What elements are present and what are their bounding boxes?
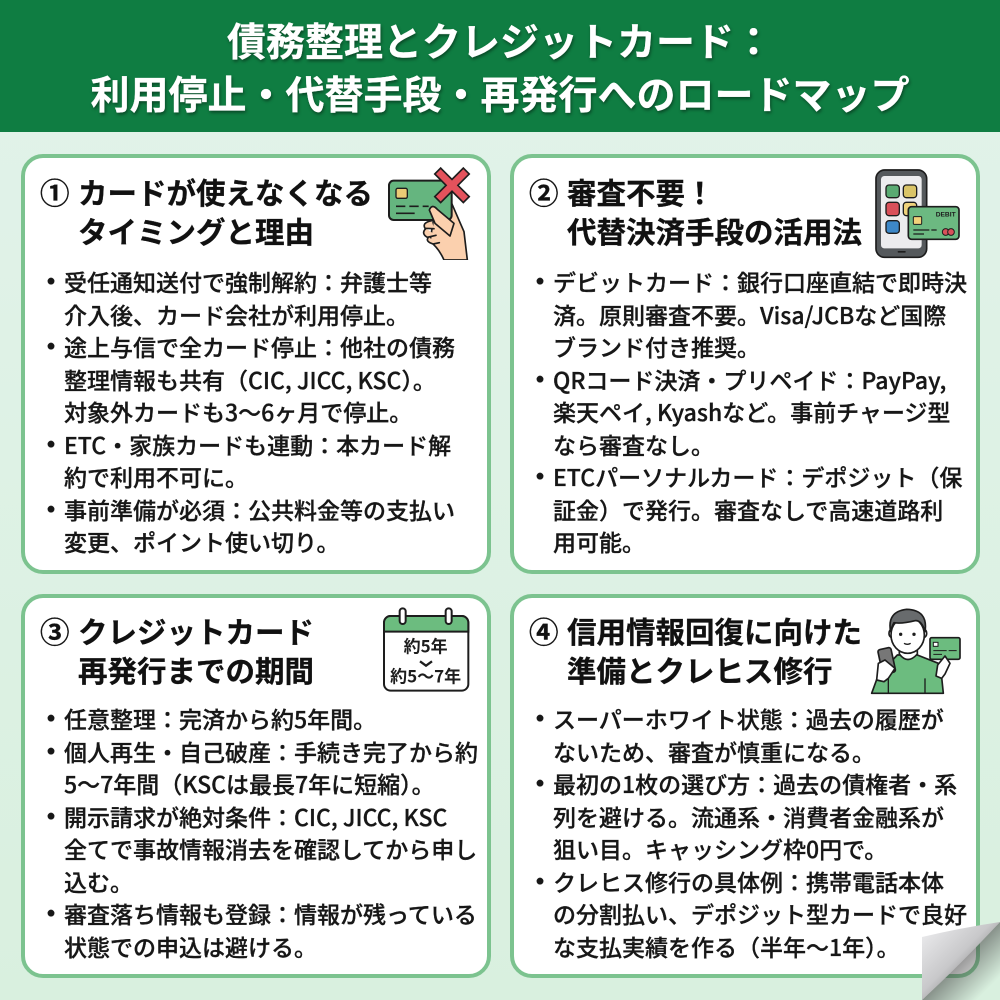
panel: 3 reissue period: •	[47, 802, 55, 828]
heading 2: 審査不要！ 代替決済手段の活用法	[567, 171, 862, 252]
heading 4: ④	[529, 610, 559, 652]
panel: 4 credit recovery	[510, 594, 980, 978]
panel: 2 alternative payment: •	[536, 366, 544, 392]
heading 2: ②	[529, 171, 559, 213]
panel: 1 card stop timing: •	[47, 268, 55, 294]
icon: card with red cross held in hand	[388, 166, 470, 260]
panel: 2 alternative payment: •	[536, 268, 544, 294]
icon: smartphone with apps and debit card	[875, 169, 960, 258]
icon: calendar	[383, 607, 470, 692]
body text 2: デビットカード：銀行口座直結で即時決 済。原則審査不要。Visa/JCBなど国際 ブランド付き推奨。 QRコード決済・プリペイド：PayPay, 楽天ペイ, Kyashなど。事前チャージ型 なら審査なし。 ETCパーソナルカード：デポジット（保 証金）で発行。審査なしで高速道路利 用可能。	[553, 264, 967, 558]
calendar text upper: 約5年	[404, 633, 448, 658]
debit label: DEBIT	[936, 212, 956, 219]
panel: 4 credit recovery: •	[536, 770, 544, 796]
page curl corner	[922, 922, 1000, 1000]
panel: 1 card stop timing: •	[47, 496, 55, 522]
title line 1: 債務整理とクレジットカード：	[227, 12, 773, 68]
heading 3: ③	[40, 610, 70, 652]
body text 4: スーパーホワイト状態：過去の履歴が ないため、審査が慎重になる。 最初の1枚の選び方：過去の債権者・系 列を避ける。流通系・消費者金融系が 狙い目。キャッシング枠0円で。 クレヒス修行の具体例：携帯電話本体 の分割払い、デポジット型カードで良好 な支払実績を作る（半年～1年）。	[553, 701, 967, 962]
heading 1: カードが使えなくなる タイミングと理由	[78, 171, 373, 252]
body text 1: 受任通知送付で強制解約：弁護士等 介入後、カード会社が利用停止。 途上与信で全カード停止：他社の債務 整理情報も共有（CIC, JICC, KSC）。 対象外カードも3～6ヶ月で停止。 ETC・家族カードも連動：本カード解 約で利用不可に。 事前準備が必須：公共料金等の支払い 変更、ポイント使い切り。	[64, 264, 455, 558]
panel: 3 reissue period: •	[47, 900, 55, 926]
panel: 3 reissue period: •	[47, 705, 55, 731]
panel: 1 card stop timing	[21, 154, 491, 574]
calendar text lower: 約5～7年	[390, 663, 461, 688]
icon: person with phone and card	[870, 608, 961, 694]
panel: 2 alternative payment: •	[536, 463, 544, 489]
heading 3: クレジットカード 再発行までの期間	[78, 610, 314, 690]
panel: 4 credit recovery: •	[536, 868, 544, 894]
panel: 3 reissue period: •	[47, 738, 55, 764]
panel: 1 card stop timing: •	[47, 333, 55, 359]
heading 4: 信用情報回復に向けた 準備とクレヒス修行	[567, 610, 862, 690]
heading 1: ①	[40, 171, 70, 213]
panel: 2 alternative payment	[510, 154, 980, 574]
header banner	[0, 0, 1000, 132]
panel: 4 credit recovery: •	[536, 705, 544, 731]
body text 3: 任意整理：完済から約5年間。 個人再生・自己破産：手続き完了から約 5～7年間（KSCは最長7年に短縮）。 開示請求が絶対条件：CIC, JICC, KSC 全てで事故情報消去を確認してから申し 込む。 審査落ち情報も登録：情報が残っている 状態での申込は避ける。	[64, 701, 478, 962]
title line 2: 利用停止・代替手段・再発行へのロードマップ	[90, 65, 910, 121]
panel: 3 reissue period	[21, 594, 491, 978]
panel: 1 card stop timing: •	[47, 430, 55, 456]
